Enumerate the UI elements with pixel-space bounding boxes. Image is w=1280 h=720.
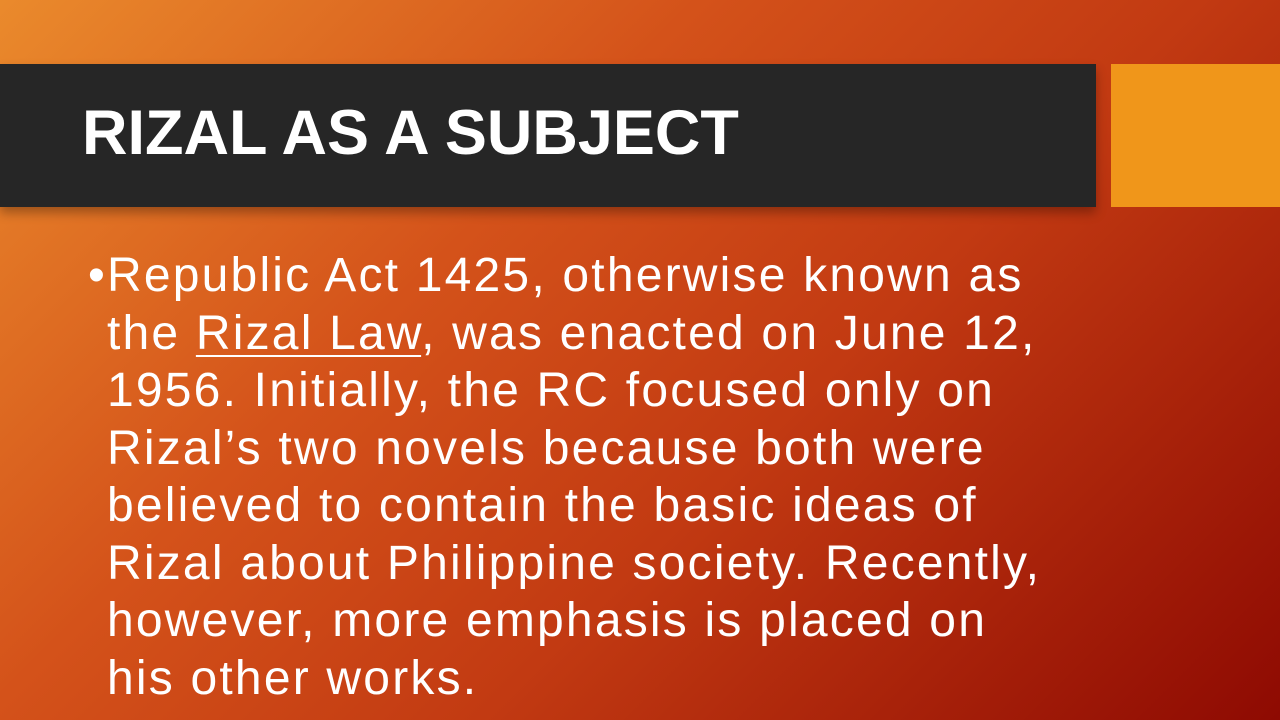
text: Rizal’s two novels because both were: [107, 422, 986, 474]
text: Republic Act 1425, otherwise known as: [107, 249, 1024, 302]
text: Rizal about Philippine society. Recently,: [107, 536, 1041, 590]
text: •: [88, 249, 107, 302]
accent box: [1111, 64, 1280, 207]
text: his other works.: [107, 652, 478, 704]
text: however, more emphasis is placed on: [107, 594, 987, 647]
title: RIZAL AS A SUBJECT: [82, 98, 739, 168]
body text: [88, 249, 1041, 704]
text: 1956. Initially, the RC focused only on: [107, 364, 995, 417]
text: believed to contain the basic ideas of: [107, 479, 978, 532]
title bar: [0, 64, 1096, 207]
text: the Rizal Law, was enacted on June 12,: [107, 306, 1036, 360]
